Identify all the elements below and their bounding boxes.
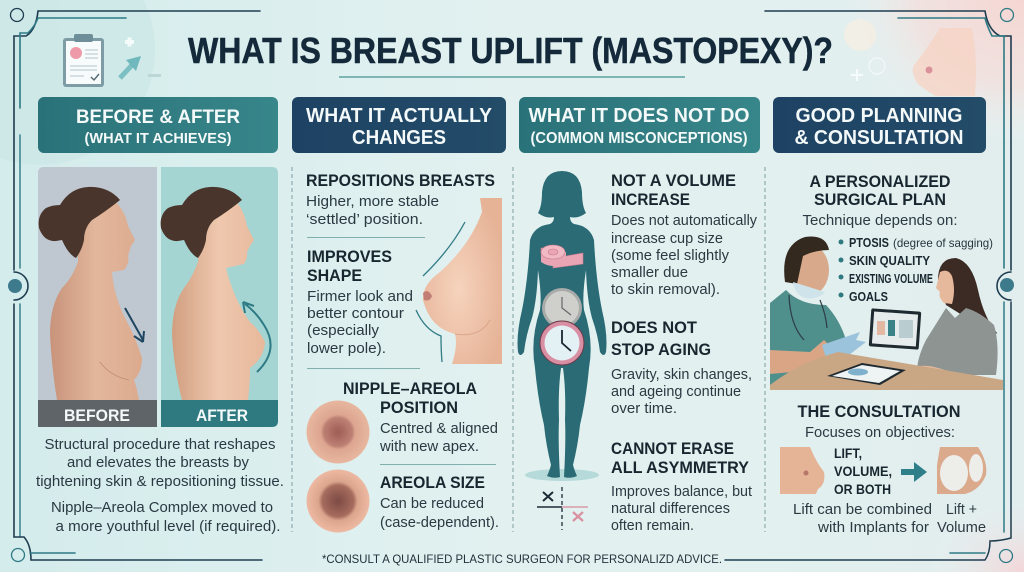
list: technique factors: EXISTING VOLUME [849, 271, 933, 286]
text: nipple-areola position: Centred & aligned [380, 420, 498, 437]
text: combined with implants: with Implants for [817, 519, 929, 536]
image: before consultation [780, 447, 824, 494]
after photo [161, 167, 278, 427]
header: what it actually changes [292, 97, 506, 153]
title: WHAT IS BREAST UPLIFT (MASTOPEXY)? [188, 30, 833, 71]
text: combined with implants [793, 501, 932, 536]
header: good planning and consultation [773, 97, 986, 153]
text: the consultation [798, 402, 960, 441]
text: cannot erase all asymmetry: CANNOT ERASE [611, 439, 734, 458]
label: before: BEFORE [64, 406, 130, 425]
text: improves shape: Firmer look and [307, 288, 413, 305]
text: lift plus volume: Lift + [946, 501, 977, 518]
panel: before and after [38, 167, 278, 427]
text: improves shape: (especially [307, 322, 379, 339]
list: technique factors: (degree of sagging) [893, 236, 993, 250]
text: cannot erase all asymmetry: often remain. [611, 517, 694, 534]
text: personalized surgical plan: Technique depends on: [802, 212, 958, 229]
text: the consultation: Focuses on objectives: [805, 424, 955, 441]
icon: areola size [306, 470, 370, 532]
text: not a volume increase: smaller due [611, 264, 688, 281]
text: cannot erase all asymmetry: natural differences [611, 500, 730, 517]
text: not a volume increase: increase cup size [611, 230, 723, 247]
text: repositions breasts: REPOSITIONS BREASTS [306, 171, 495, 190]
text: repositions breasts: ‘settled’ position. [306, 211, 423, 228]
text: not a volume increase: Does not automatically [611, 212, 757, 229]
icon: decorative body contour, top right [844, 19, 976, 96]
icon: measuring tape [541, 245, 583, 268]
text: improves shape: lower pole). [307, 340, 386, 357]
list: technique factors: SKIN QUALITY [849, 253, 930, 268]
table [770, 352, 1003, 390]
image: lift with implants [937, 447, 986, 494]
text: improves shape: SHAPE [307, 266, 362, 285]
text: areola size: AREOLA SIZE [380, 473, 485, 492]
panel: what it does not do [611, 171, 757, 534]
text: nipple-areola position: with new apex. [379, 438, 479, 455]
arrow: to combined result [901, 462, 927, 482]
arrow: downward [125, 308, 144, 342]
header: before and after: BEFORE & AFTER [76, 107, 240, 128]
text: personalized surgical plan [802, 172, 958, 229]
text: does not stop aging: Gravity, skin changes, [611, 366, 752, 383]
text: repositions breasts [306, 171, 495, 228]
arrow: upward curve [243, 302, 271, 372]
header: what it actually changes: WHAT IT ACTUALLY [306, 105, 493, 127]
text: does not stop aging [611, 318, 752, 417]
text: procedure description [36, 436, 284, 535]
icon: asymmetry marks [537, 487, 588, 530]
text: nipple-areola position [307, 368, 498, 455]
text: procedure description: tightening skin & repositioning tissue. [36, 473, 284, 490]
text: lift volume or both [834, 445, 892, 497]
text: cannot erase all asymmetry: Improves balance, but [611, 483, 753, 500]
illustration: surgeon and patient at table [770, 237, 1003, 390]
panel: good planning and consultation [770, 172, 1003, 536]
text: procedure description: Nipple–Areola Complex moved to [51, 499, 273, 516]
header: before and after: (WHAT IT ACHIEVES) [84, 130, 232, 147]
text: lift volume or both: LIFT, [834, 445, 862, 461]
icon: faded clock [542, 288, 582, 328]
text: repositions breasts: Higher, more stable [306, 193, 439, 210]
text: nipple-areola position: POSITION [380, 398, 458, 417]
text: lift volume or both: OR BOTH [834, 481, 891, 497]
text: not a volume increase: INCREASE [611, 190, 690, 209]
text: areola size: Can be reduced [380, 495, 484, 512]
list: technique factors: PTOSIS [849, 235, 889, 250]
header: good planning and consultation: & CONSULTATION [794, 127, 964, 149]
surgeon [770, 237, 866, 386]
text: improves shape [307, 237, 425, 357]
header: before and after [38, 97, 278, 153]
text: not a volume increase: NOT A VOLUME [611, 171, 736, 190]
text: not a volume increase: to skin removal). [611, 281, 720, 298]
list: technique factors: GOALS [849, 289, 888, 304]
list: technique factors [838, 235, 993, 304]
header: what it does not do [519, 97, 760, 153]
label: after: AFTER [196, 406, 248, 425]
header: good planning and consultation: GOOD PLANNING [796, 105, 962, 127]
text: not a volume increase [611, 171, 757, 298]
text: lift plus volume [937, 501, 986, 536]
patient [913, 258, 998, 378]
text: areola size: (case-dependent). [380, 514, 499, 531]
text: improves shape: better contour [307, 305, 404, 322]
panel: what it actually changes [306, 171, 502, 532]
icon: areola position [306, 400, 370, 464]
female silhouette [518, 171, 606, 478]
icon: clipboard with plus and arrow [63, 34, 161, 87]
header: what it does not do: WHAT IT DOES NOT DO [528, 105, 750, 127]
text: does not stop aging: over time. [611, 400, 677, 417]
header: what it actually changes: CHANGES [352, 127, 446, 149]
text: the consultation: THE CONSULTATION [798, 402, 960, 421]
column dividers [292, 167, 765, 532]
text: combined with implants: Lift can be combined [793, 501, 932, 518]
footer disclaimer: *CONSULT A QUALIFIED PLASTIC SURGEON FOR PERSONALIZD ADVICE. [322, 552, 722, 566]
text: not a volume increase: (some feel slightly [611, 247, 729, 264]
tablet [869, 308, 921, 350]
text: does not stop aging: STOP AGING [611, 340, 711, 359]
text: cannot erase all asymmetry: ALL ASYMMETRY [611, 458, 750, 477]
before photo [38, 167, 157, 427]
text: procedure description: a more youthful level (if required). [56, 518, 280, 535]
text: areola size [380, 464, 499, 531]
text: personalized surgical plan: SURGICAL PLAN [814, 190, 946, 209]
text: does not stop aging: DOES NOT [611, 318, 698, 337]
text: personalized surgical plan: A PERSONALIZED [810, 172, 950, 191]
text: lift plus volume: Volume [937, 519, 986, 536]
icon: clock [540, 321, 584, 365]
text: procedure description: and elevates the breasts by [67, 454, 249, 471]
panel: silhouette with tape and clocks [518, 171, 606, 530]
text: does not stop aging: and ageing continue [611, 383, 741, 400]
text: improves shape: IMPROVES [307, 247, 392, 266]
text: nipple-areola position: NIPPLE–AREOLA [343, 379, 477, 398]
header: what it does not do: (COMMON MISCONCEPTIONS) [530, 130, 748, 147]
text: lift volume or both: VOLUME, [834, 463, 892, 479]
text: cannot erase all asymmetry [611, 439, 753, 534]
illustration: side contour [416, 198, 502, 364]
text: procedure description: Structural procedure that reshapes [44, 436, 276, 453]
